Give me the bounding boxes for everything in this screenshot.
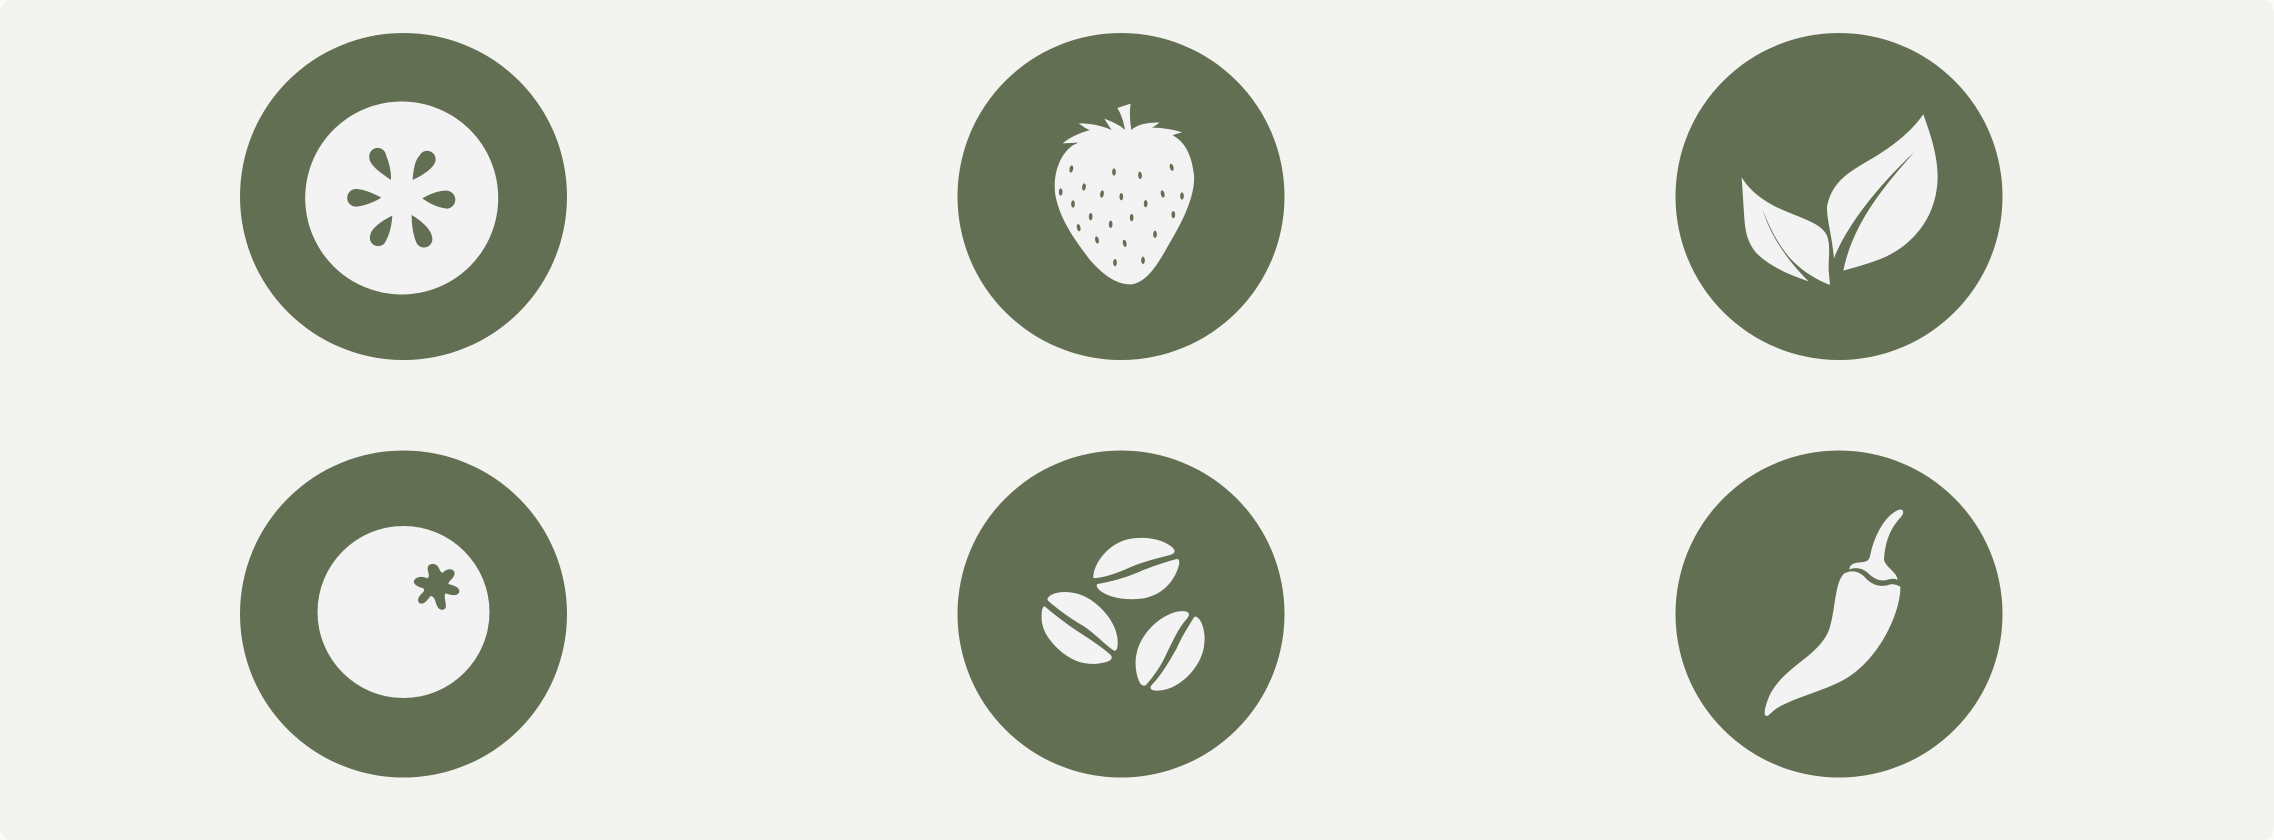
- icon: chili pepper: [1676, 450, 2002, 778]
- two leaves: [1742, 114, 1938, 285]
- icon: leaves: [1676, 33, 2002, 360]
- icon: strawberry: [958, 33, 1284, 360]
- strawberry body: [1055, 104, 1194, 284]
- three beans: [1042, 538, 1205, 691]
- icon: blueberry: [240, 450, 567, 778]
- cucumber seeds: [347, 148, 455, 248]
- pepper shape: [1765, 509, 1903, 716]
- blueberry crown: [414, 564, 459, 610]
- icon: cucumber slice: [240, 33, 567, 360]
- icon: coffee beans: [958, 450, 1284, 778]
